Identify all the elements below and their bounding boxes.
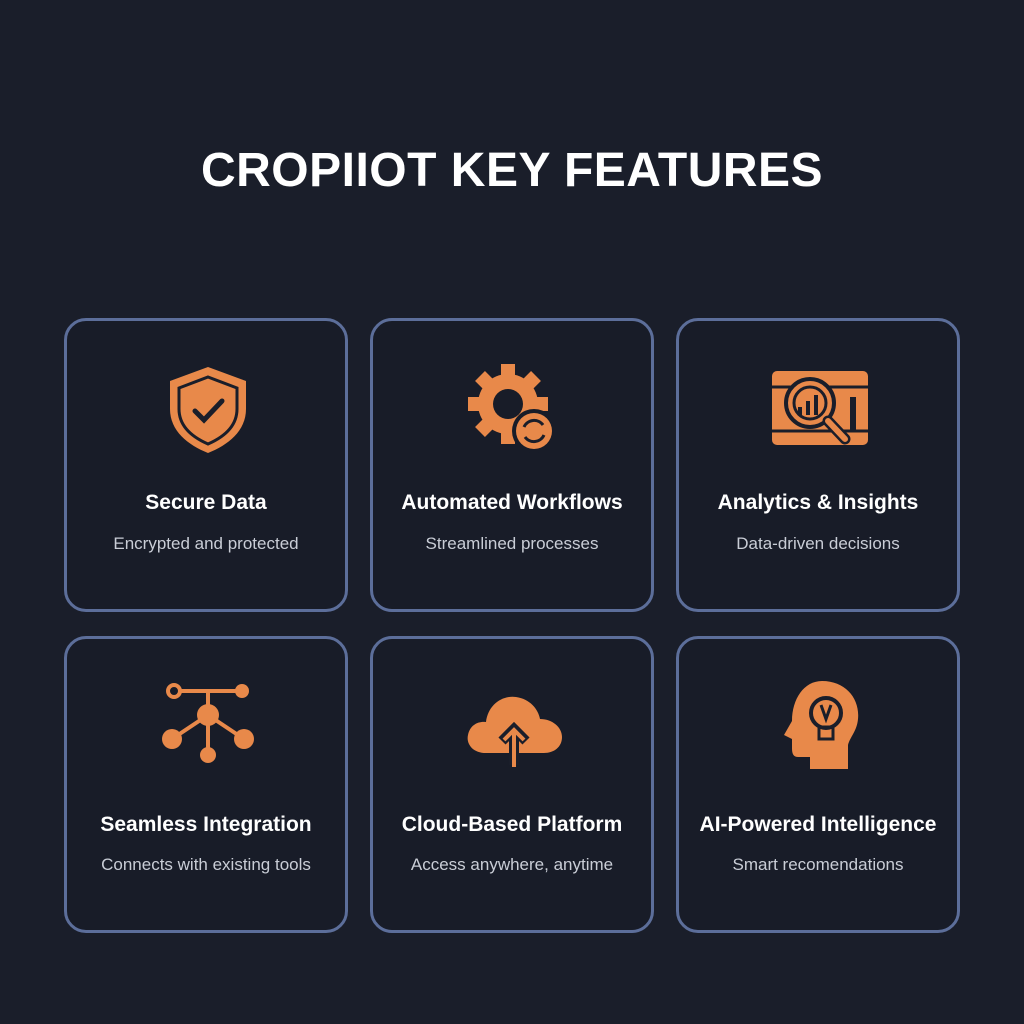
text: Smart recomendations: [732, 855, 904, 874]
heading: Seamless Integration: [100, 813, 312, 836]
heading: AI-Powered Intelligence: [700, 813, 936, 836]
heading: Analytics & Insights: [718, 491, 918, 514]
icon: shield: [170, 367, 246, 453]
text: Access anywhere, anytime: [411, 855, 613, 874]
title: CROPIIOT KEY FEATURES: [201, 144, 823, 197]
icon: cloud upload: [468, 696, 562, 767]
icon: analytics magnifier: [772, 371, 868, 445]
text: Data-driven decisions: [736, 534, 900, 553]
icon: gear: [468, 364, 552, 449]
panel: analytics: [676, 318, 960, 612]
panel: secure data: [64, 318, 348, 612]
icon: network: [162, 683, 254, 763]
panel: cloud: [370, 636, 654, 933]
panel: automated workflows: [370, 318, 654, 612]
heading: Automated Workflows: [401, 491, 623, 514]
text: Encrypted and protected: [113, 534, 299, 553]
text: Connects with existing tools: [101, 855, 311, 874]
heading: Secure Data: [145, 491, 267, 514]
icon: head with bulb: [784, 681, 858, 769]
panel: AI: [676, 636, 960, 933]
text: Streamlined processes: [426, 534, 598, 553]
panel: integration: [64, 636, 348, 933]
heading: Cloud-Based Platform: [402, 813, 622, 836]
